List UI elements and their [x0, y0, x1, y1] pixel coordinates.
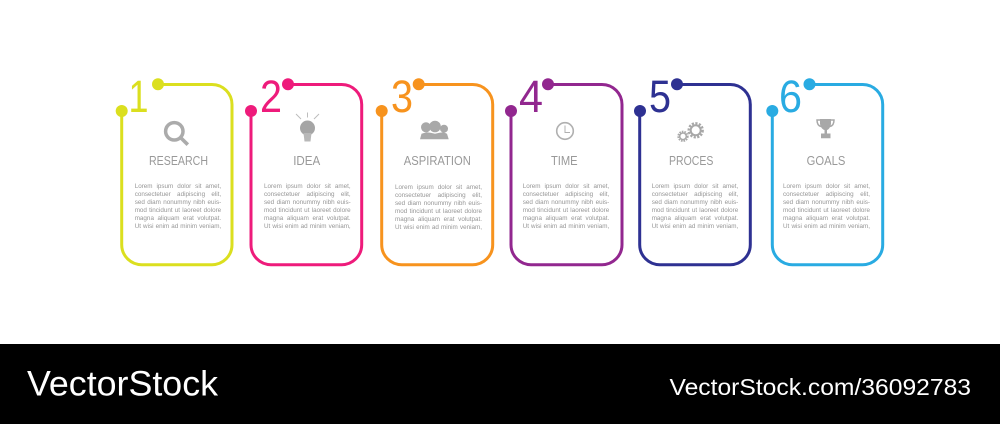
text block: aspiration: sed diam nonummy nibh euis-: [395, 200, 482, 207]
text block: research: consectetuer adipiscing elit,: [135, 191, 221, 198]
footer image id: VectorStock.com/36092783: [670, 374, 971, 400]
number 6: 6: [779, 71, 802, 122]
number 5: 5: [649, 71, 671, 122]
icon: gears: [678, 123, 703, 141]
text block: goals: mod tincidunt ut laoreet dolore: [783, 207, 870, 214]
text block: research: Ut wisi enim ad minim veniam,: [135, 223, 221, 230]
text block: goals: consectetuer adipiscing elit,: [783, 191, 870, 198]
text block: aspiration: Ut wisi enim ad minim veniam,: [395, 224, 482, 231]
text block: goals: Lorem ipsum dolor sit amet,: [783, 183, 870, 190]
number 4: 4: [519, 71, 543, 122]
text block: goals: Ut wisi enim ad minim veniam,: [783, 223, 870, 230]
panel: step 3 aspiration: [376, 71, 493, 265]
text block: research: [135, 183, 221, 233]
text block: proces: magna aliquam erat volutpat.: [652, 215, 738, 222]
text block: proces: mod tincidunt ut laoreet dolore: [652, 207, 738, 214]
text block: aspiration: Lorem ipsum dolor sit amet,: [395, 184, 482, 191]
footer logo: VectorStock: [27, 364, 218, 404]
text block: idea: Lorem ipsum dolor sit amet,: [264, 183, 351, 190]
text block: aspiration: magna aliquam erat volutpat.: [395, 216, 482, 223]
text block: time: consectetuer adipiscing elit,: [523, 191, 609, 198]
text block: idea: consectetuer adipiscing elit,: [264, 191, 351, 198]
text block: idea: Ut wisi enim ad minim veniam,: [264, 223, 351, 230]
text block: idea: magna aliquam erat volutpat.: [264, 215, 351, 222]
panel: step 6 goals: [766, 71, 883, 265]
footer bar: [0, 344, 1000, 424]
number 1: 1: [128, 71, 148, 122]
text block: time: magna aliquam erat volutpat.: [523, 215, 609, 222]
panel: step 2 idea: [245, 71, 362, 265]
heading: research: RESEARCH: [149, 154, 208, 168]
heading: time: TIME: [551, 154, 578, 168]
heading: goals: GOALS: [807, 154, 845, 168]
text block: proces: [652, 183, 738, 233]
text block: research: Lorem ipsum dolor sit amet,: [135, 183, 221, 190]
text block: goals: sed diam nonummy nibh euis-: [783, 199, 870, 206]
number 3: 3: [391, 71, 413, 122]
icon: trophy: [817, 119, 834, 138]
panel: step 1 research: [116, 71, 232, 265]
icon: magnifier: [166, 123, 188, 145]
text block: goals: magna aliquam erat volutpat.: [783, 215, 870, 222]
text block: research: sed diam nonummy nibh euis-: [135, 199, 221, 206]
text block: time: Lorem ipsum dolor sit amet,: [523, 183, 609, 190]
text block: proces: Lorem ipsum dolor sit amet,: [652, 183, 738, 190]
text block: aspiration: consectetuer adipiscing elit,: [395, 192, 482, 199]
text block: aspiration: [395, 184, 482, 234]
text block: time: Ut wisi enim ad minim veniam,: [523, 223, 609, 230]
text block: time: sed diam nonummy nibh euis-: [523, 199, 609, 206]
text block: idea: sed diam nonummy nibh euis-: [264, 199, 351, 206]
heading: idea: IDEA: [293, 154, 321, 168]
icon: group of people: [420, 121, 449, 139]
text block: proces: sed diam nonummy nibh euis-: [652, 199, 738, 206]
panel: step 4 time: [505, 71, 622, 265]
heading: proces: PROCES: [669, 154, 713, 168]
text block: goals: [783, 183, 870, 233]
text block: research: magna aliquam erat volutpat.: [135, 215, 221, 222]
text block: idea: [264, 183, 351, 233]
text block: proces: Ut wisi enim ad minim veniam,: [652, 223, 738, 230]
icon: light bulb: [296, 112, 319, 142]
number 2: 2: [260, 71, 282, 122]
heading: aspiration: ASPIRATION: [404, 154, 471, 168]
panel: step 5 proces: [634, 71, 750, 265]
text block: time: [523, 183, 609, 233]
text block: aspiration: mod tincidunt ut laoreet dolore: [395, 208, 482, 215]
icon: clock: [557, 123, 573, 139]
text block: research: mod tincidunt ut laoreet dolore: [135, 207, 221, 214]
text block: time: mod tincidunt ut laoreet dolore: [523, 207, 609, 214]
text block: idea: mod tincidunt ut laoreet dolore: [264, 207, 351, 214]
text block: proces: consectetuer adipiscing elit,: [652, 191, 738, 198]
